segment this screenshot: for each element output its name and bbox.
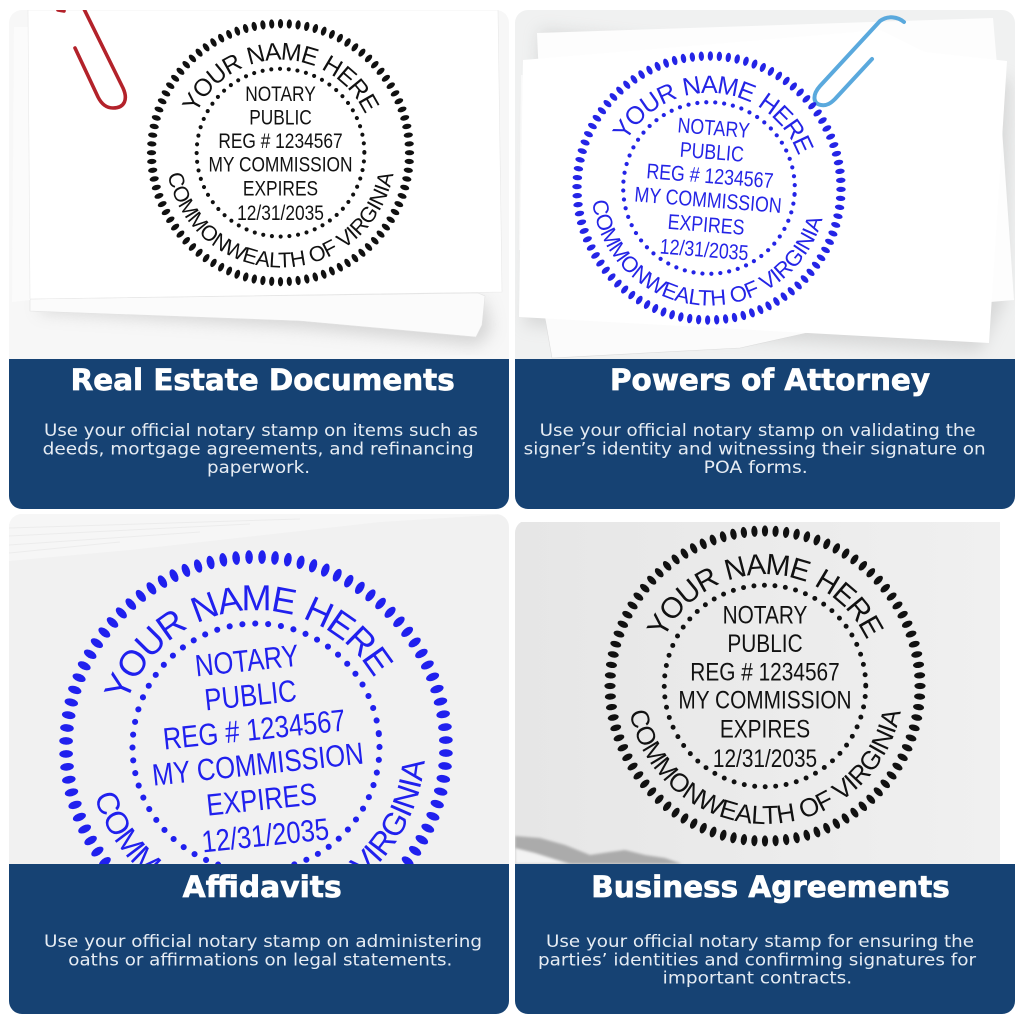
stamp: blue notary seal, cropped: 12/31/2035	[200, 811, 331, 859]
stamp: blue notary seal, cropped: PUBLIC	[203, 673, 298, 717]
heading: Real Estate Documents	[71, 363, 455, 397]
stamp: black notary seal: NOTARY	[723, 601, 807, 629]
stamp: black notary seal: COMMONWEALTH OF VIRGINIA	[631, 710, 901, 824]
stamp: blue notary seal	[572, 51, 846, 325]
body text: Use your official notary stamp on administering	[44, 932, 482, 952]
body text: Use your official notary stamp for ensuring the	[546, 932, 974, 952]
body text	[43, 421, 478, 478]
stamp: black notary seal: REG # 1234567	[690, 657, 840, 686]
body text: oaths or affirmations on legal statements.	[68, 950, 452, 970]
stamp: black notary seal	[146, 19, 414, 286]
photo: paper surface	[9, 514, 509, 864]
stamp: blue notary seal, cropped: YOUR NAME HERE	[104, 585, 394, 693]
body text	[524, 421, 986, 478]
panel: Real Estate Documents	[9, 10, 509, 509]
stamp: blue notary seal: MY COMMISSION	[634, 183, 782, 218]
icon: blue paperclip	[814, 17, 904, 105]
stamp: blue notary seal, cropped	[59, 550, 453, 864]
stamp: black notary seal: YOUR NAME HERE	[646, 554, 884, 639]
stamp: black notary seal: PUBLIC	[727, 629, 803, 657]
stamp: black notary seal: NOTARY	[245, 83, 316, 106]
body text: important contracts.	[663, 969, 852, 989]
body text	[538, 932, 976, 989]
body text: POA forms.	[704, 458, 808, 478]
panel: Powers of Attorney	[515, 10, 1015, 509]
stamp: black notary seal: PUBLIC	[249, 107, 312, 130]
stamp: blue notary seal: REG # 1234567	[646, 160, 774, 194]
caption background	[9, 864, 509, 1014]
stamp: blue notary seal: YOUR NAME HERE	[612, 76, 814, 155]
photo: grey paper with torn edge	[515, 520, 1015, 870]
body text	[44, 932, 482, 970]
stamp: blue notary seal: NOTARY	[677, 114, 751, 143]
stamp: black notary seal: MY COMMISSION	[678, 686, 852, 714]
body text: paperwork.	[207, 458, 310, 478]
caption background	[515, 864, 1015, 1014]
body text: parties’ identities and confirming signatures for	[538, 950, 976, 970]
panel: Affidavits	[9, 514, 509, 1014]
photo: stacked white cards	[515, 10, 1015, 360]
stamp: black notary seal: EXPIRES	[243, 178, 318, 201]
stamp: blue notary seal, cropped: REG # 1234567	[161, 702, 347, 756]
caption background	[9, 359, 509, 509]
photo: stacked white cards	[9, 10, 509, 360]
stamp: black notary seal: EXPIRES	[720, 715, 810, 743]
stamp: blue notary seal: PUBLIC	[679, 138, 745, 167]
body text: deeds, mortgage agreements, and refinancing	[43, 440, 474, 460]
caption background	[515, 359, 1015, 509]
stamp: blue notary seal, cropped: MY COMMISSION	[150, 735, 365, 792]
stamp: blue notary seal: EXPIRES	[667, 210, 745, 240]
stamp: black notary seal	[604, 525, 926, 847]
stamp: black notary seal: COMMONWEALTH OF VIRGINIA	[169, 173, 394, 268]
stamp: blue notary seal, cropped: EXPIRES	[205, 776, 318, 822]
stamp: blue notary seal: 12/31/2035	[659, 235, 749, 266]
body text: Use your official notary stamp on items such as	[44, 421, 478, 441]
stamp: blue notary seal: COMMONWEALTH OF VIRGINIA	[593, 200, 823, 306]
stamp: black notary seal: REG # 1234567	[218, 131, 343, 153]
heading: Powers of Attorney	[610, 363, 930, 397]
body text: Use your official notary stamp on validating the	[540, 421, 976, 441]
heading: Business Agreements	[591, 870, 950, 904]
stamp: black notary seal: MY COMMISSION	[208, 154, 353, 177]
heading: Affidavits	[183, 870, 342, 904]
body text: signer’s identity and witnessing their signature on	[524, 440, 986, 460]
stamp: black notary seal: 12/31/2035	[713, 744, 817, 773]
stamp: blue notary seal, cropped: COMMONWEALTH OF VIRGINIA	[97, 760, 425, 864]
stamp: blue notary seal, cropped: NOTARY	[193, 637, 301, 683]
icon: red paperclip	[58, 9, 125, 108]
stamp: black notary seal: YOUR NAME HERE	[182, 42, 380, 114]
stamp: black notary seal: 12/31/2035	[237, 203, 324, 226]
panel: Business Agreements	[515, 522, 1015, 1014]
